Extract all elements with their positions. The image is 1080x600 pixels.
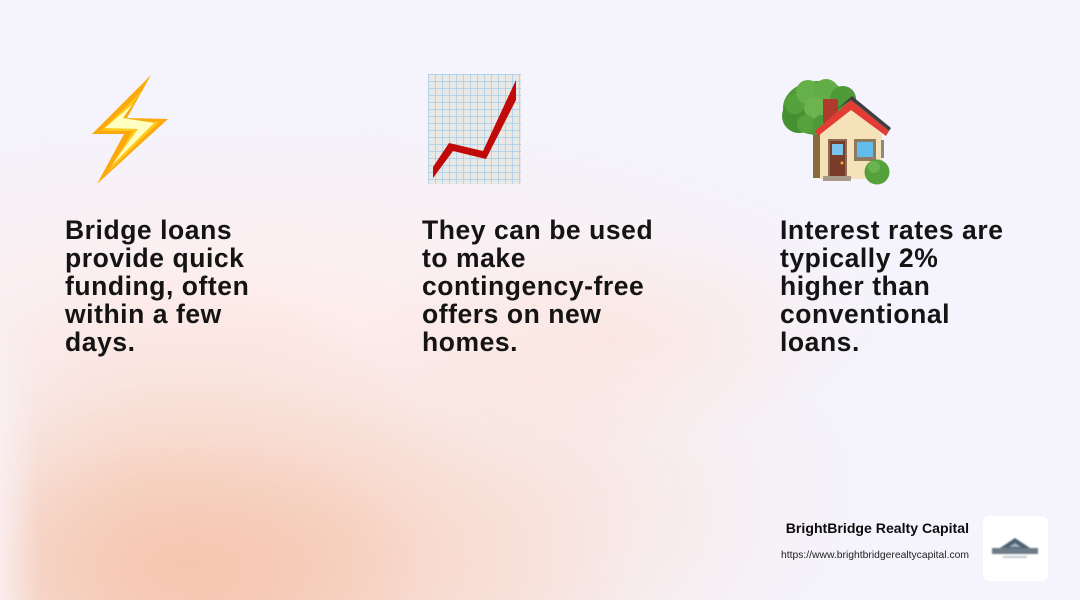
heading text: quick funding: Bridge loans [65, 215, 232, 245]
heading text: interest rates: typically 2% [780, 243, 938, 273]
heading text: quick funding: days. [65, 327, 136, 357]
heading text: interest rates [780, 215, 1004, 357]
heading text: contingency-free offers: to make [422, 243, 526, 273]
heading text: contingency-free offers: offers on new [422, 299, 601, 329]
heading text: interest rates: higher than [780, 271, 930, 301]
heading text: contingency-free offers: They can be used [422, 215, 653, 245]
icon: lightning bolt [92, 75, 168, 184]
logo card [983, 516, 1048, 581]
heading text: contingency-free offers: contingency-free [422, 271, 644, 301]
heading text: interest rates: Interest rates are [780, 215, 1004, 245]
heading text: interest rates: loans. [780, 327, 860, 357]
heading text: contingency-free offers: homes. [422, 327, 518, 357]
icon: logo roof mark [991, 537, 1039, 559]
heading text: contingency-free offers [422, 215, 653, 357]
heading text: quick funding: within a few [65, 299, 222, 329]
heading text: interest rates: conventional [780, 299, 950, 329]
heading text: quick funding: provide quick [65, 243, 244, 273]
icon: rising chart [428, 74, 521, 184]
heading text: quick funding [64, 215, 249, 357]
company url: https://www.brightbridgerealtycapital.com [781, 550, 969, 561]
heading text: quick funding: funding, often [65, 271, 249, 301]
company name: BrightBridge Realty Capital [786, 520, 969, 536]
icon: house with tree [782, 79, 891, 184]
